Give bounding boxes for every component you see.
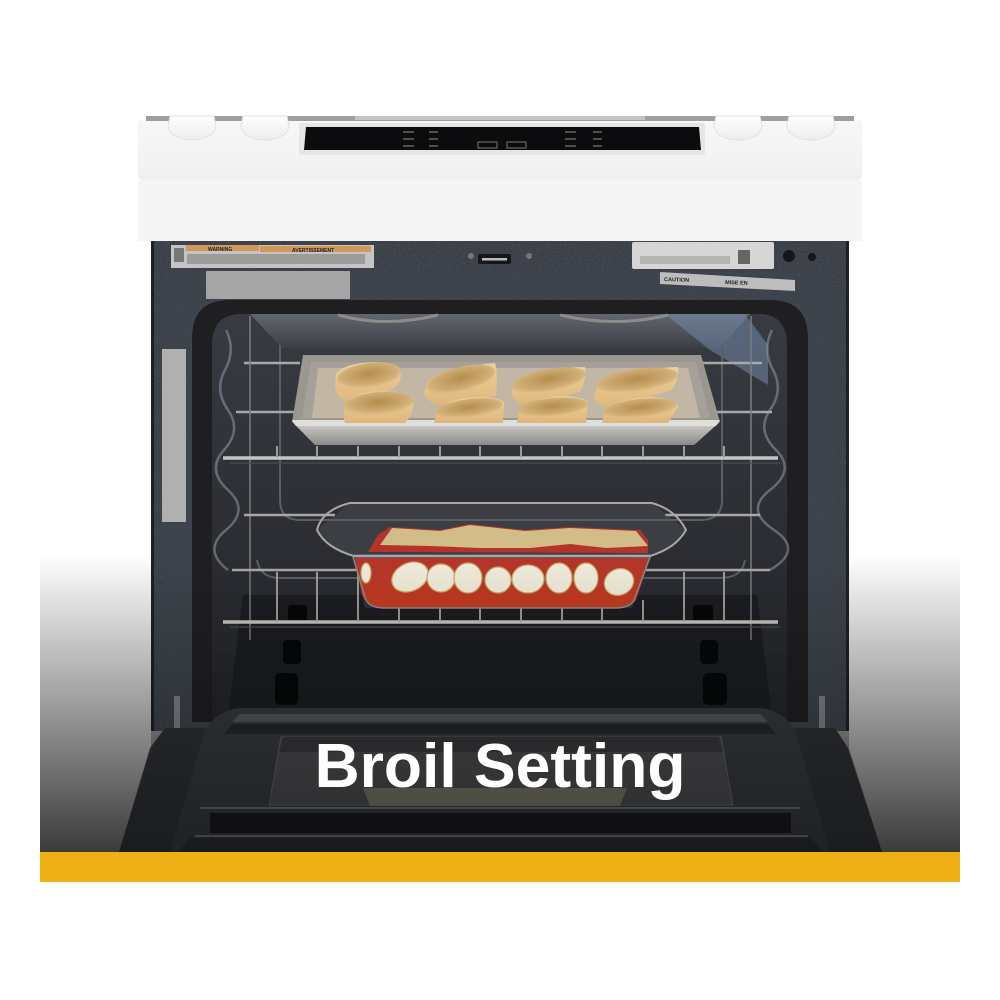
warning label: WARNING xyxy=(208,247,232,253)
warning label: AVERTISSEMENT xyxy=(292,248,334,254)
pasta shells xyxy=(361,556,638,600)
safety instruction label xyxy=(206,271,350,299)
side sticker xyxy=(162,349,186,522)
hinges xyxy=(174,696,825,734)
door window xyxy=(269,737,733,805)
sensor buttons xyxy=(783,250,816,262)
oven floor xyxy=(228,595,772,716)
title: Broil Setting xyxy=(315,732,685,801)
rating plate xyxy=(632,242,774,269)
control display xyxy=(299,123,705,155)
bottom gradient background xyxy=(40,555,960,852)
broil elements xyxy=(338,315,668,322)
baking pan with garlic bread xyxy=(292,355,720,445)
bread slices xyxy=(335,359,679,423)
oven frame xyxy=(151,241,849,731)
range cooktop and control panel xyxy=(138,116,862,180)
latch xyxy=(468,253,532,264)
yellow bar xyxy=(40,852,960,882)
upper oven rack xyxy=(223,316,780,640)
white front band xyxy=(138,180,862,241)
oven cavity xyxy=(192,300,808,722)
oven bottom shade xyxy=(119,555,882,852)
caution label: CAUTION xyxy=(664,277,689,284)
caution label: MISE EN xyxy=(725,280,748,287)
open oven door xyxy=(119,708,882,852)
glass baking dish with stuffed shells xyxy=(317,503,686,608)
cavity side embossing xyxy=(214,330,788,570)
caution label xyxy=(660,272,795,291)
floor vents xyxy=(275,605,727,705)
lower oven rack xyxy=(223,515,780,627)
warning label xyxy=(171,245,374,268)
icon: control knobs xyxy=(168,116,835,140)
door lower trim xyxy=(210,813,791,833)
